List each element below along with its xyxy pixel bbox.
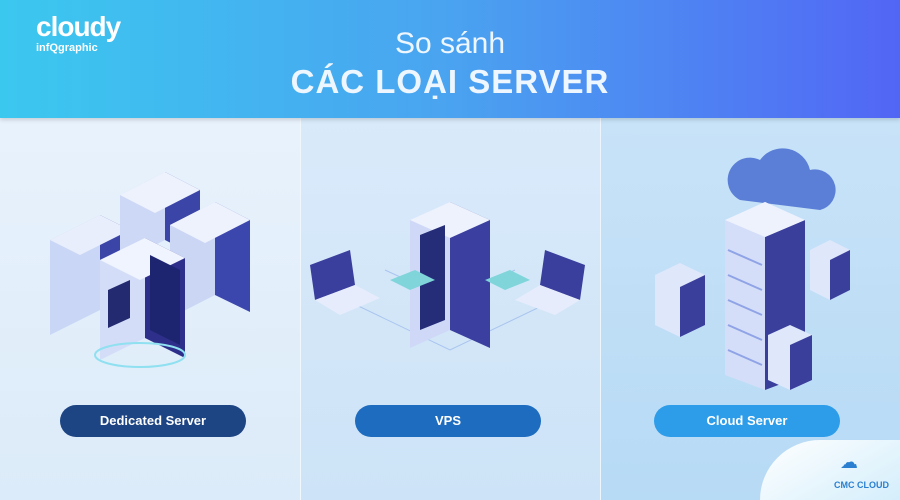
cmc cloud logo <box>760 440 900 500</box>
panel: vps <box>300 118 601 500</box>
title: So sánh <box>395 27 505 60</box>
logo: cloudy <box>36 11 120 42</box>
logo: infQgraphic <box>36 42 98 54</box>
button: cloud: Cloud Server <box>707 413 787 428</box>
title: CÁC LOẠI SERVER <box>291 63 609 100</box>
button: dedicated <box>60 405 246 437</box>
panel: cloud <box>600 118 900 500</box>
illustration: dedicated server <box>50 172 250 368</box>
cmc cloud logo: ☁ <box>840 452 858 472</box>
cmc cloud logo: CMC CLOUD <box>834 480 889 490</box>
button: vps: VPS <box>435 413 461 428</box>
button: dedicated: Dedicated Server <box>100 413 206 428</box>
header <box>0 0 900 118</box>
illustration: cloud server <box>655 148 850 390</box>
panel: dedicated <box>0 118 300 500</box>
button: cloud <box>654 405 840 437</box>
illustration: vps <box>310 202 585 350</box>
title <box>291 27 609 100</box>
button: vps <box>355 405 541 437</box>
